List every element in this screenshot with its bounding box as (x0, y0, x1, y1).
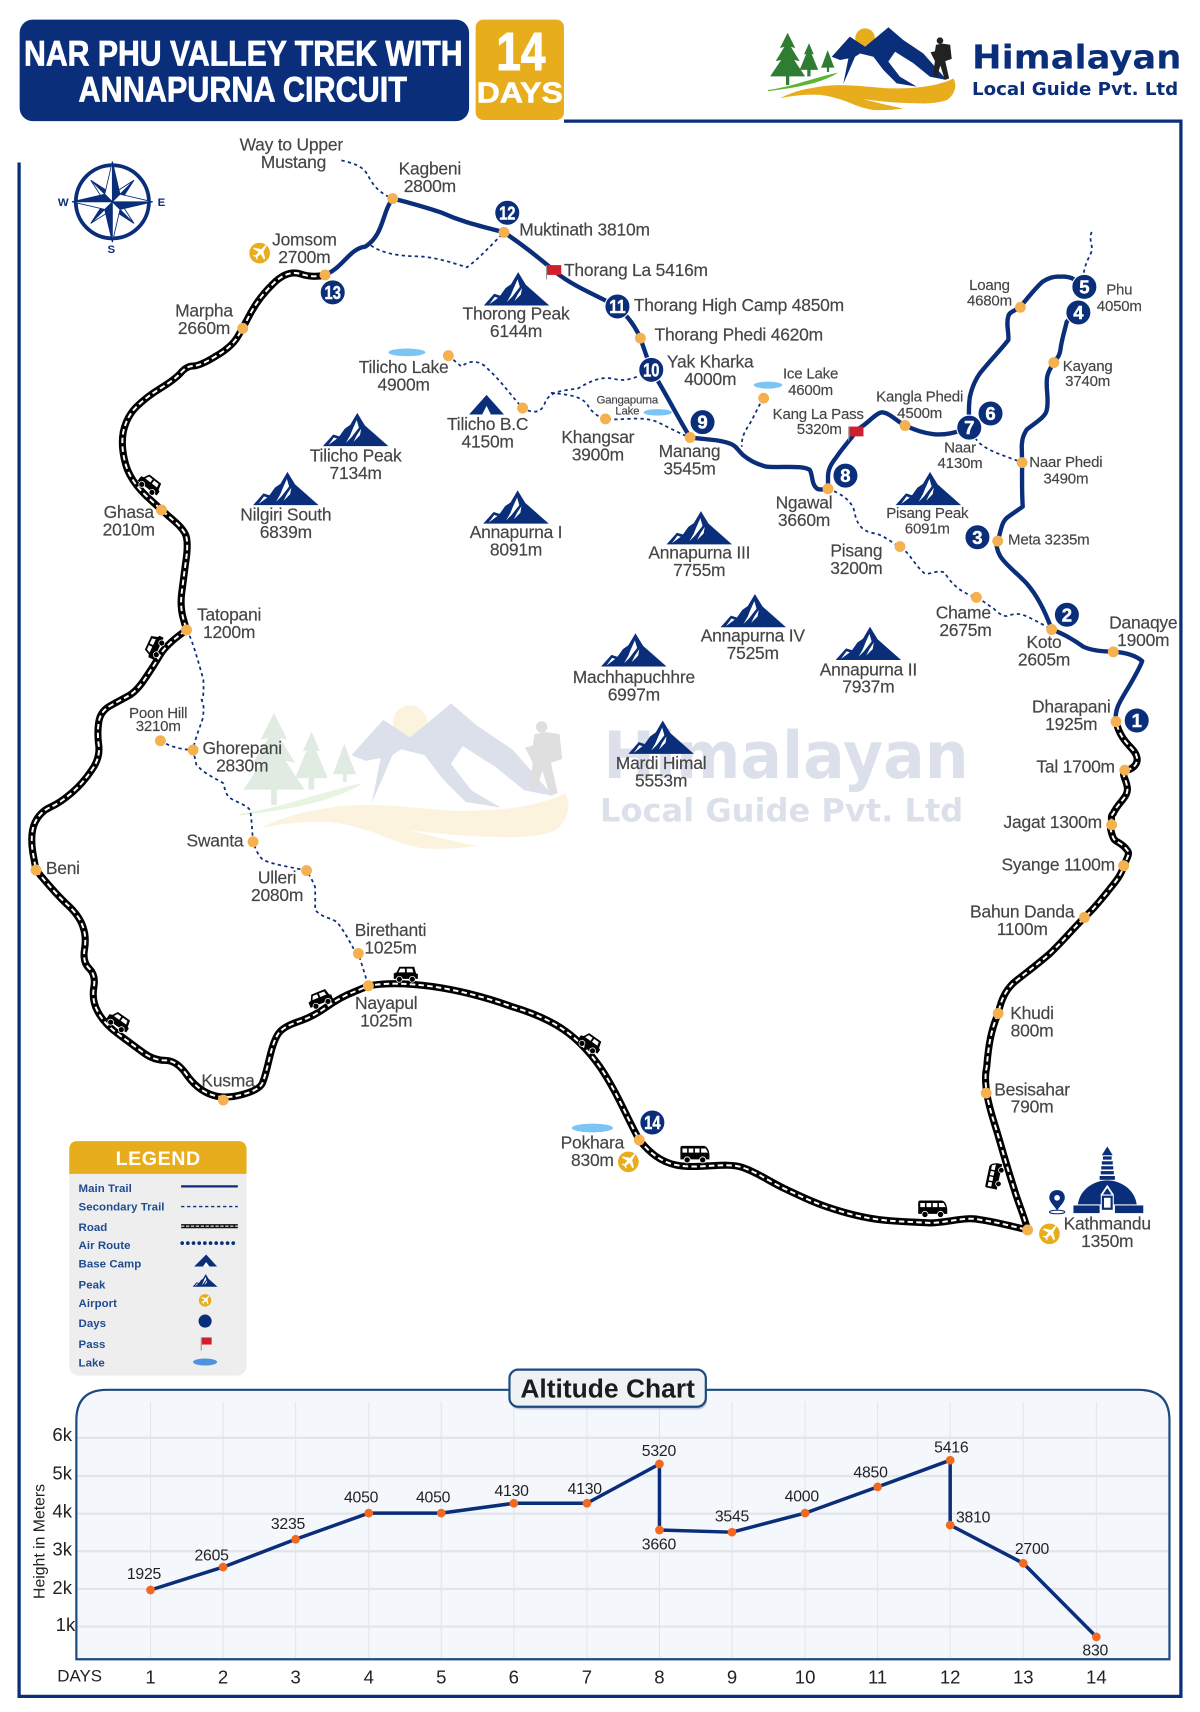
label: Tilicho Peak: 7134m (330, 463, 382, 483)
altitude chart title (509, 1370, 707, 1409)
label: Kusma: Kusma (201, 1071, 255, 1091)
label: Muktinath: Muktinath 3810m (519, 220, 650, 240)
icon: location pin (1049, 1190, 1065, 1214)
label: Tatopani: Tatopani (197, 605, 261, 625)
label: Dharapani: Dharapani (1032, 696, 1111, 716)
label: Poon Hill: Poon Hill (129, 705, 187, 722)
trail stops (31, 193, 1130, 1235)
label: Poon Hill: 3210m (136, 718, 181, 735)
label: Tilicho B.C: 4150m (462, 431, 514, 451)
label: Yak Kharka: 4000m (684, 369, 736, 389)
altitude values: 5416 (934, 1440, 969, 1457)
label: Annapurna I: Annapurna I (470, 522, 562, 542)
altitude axis labels: 4 (364, 1666, 374, 1687)
days badge (476, 20, 564, 120)
compass rose: E (158, 197, 166, 209)
legend: lake: Lake (79, 1357, 105, 1369)
altitude values: 1925 (127, 1566, 162, 1583)
label: Ghorepani: Ghorepani (202, 738, 282, 758)
altitude axis labels: 1 (145, 1666, 156, 1687)
label: Gangapurna Lake: Lake (615, 406, 639, 418)
altitude values: 3810 (956, 1509, 991, 1526)
label: Thorong Peak: 6144m (490, 321, 542, 341)
label: Phu: Phu (1106, 282, 1132, 299)
label: Naar Phedi: 3490m (1043, 470, 1088, 487)
label: Naar: Naar (944, 440, 976, 457)
label: Loang: Loang (969, 277, 1010, 294)
day number badges: 5 (1079, 276, 1090, 297)
label: Jomsom: 2700m (278, 247, 330, 267)
label: Ghasa: 2010m (103, 520, 155, 540)
label: Way to Upper Mustang: Way to Upper (240, 135, 343, 155)
altitude axis labels: 2k (52, 1577, 73, 1598)
label: Way to Upper Mustang: Mustang (261, 152, 326, 172)
label: Nayapul: 1025m (360, 1011, 412, 1031)
company logo: Local Guide Pvt. Ltd (972, 79, 1178, 100)
label: Thorong Peak: Thorong Peak (463, 304, 570, 324)
label: Kayang: 3740m (1065, 373, 1110, 390)
altitude axis labels: 10 (795, 1666, 815, 1687)
label: Tal: Tal 1700m (1036, 756, 1115, 776)
label: Annapurna IV: 7525m (727, 643, 779, 663)
icon: Tilicho base camp (469, 395, 504, 415)
legend panel: LEGEND (116, 1148, 201, 1170)
label: Thorang La: Thorang La 5416m (564, 260, 708, 280)
label: Birethanti: Birethanti (355, 920, 426, 940)
label: Pisang Peak: Pisang Peak (886, 505, 969, 522)
label: Nilgiri South: Nilgiri South (240, 504, 331, 524)
label: Bahun Danda: 1100m (997, 919, 1048, 939)
watermark logo: Local Guide Pvt. Ltd (600, 793, 963, 829)
label: Annapurna III: Annapurna III (648, 543, 750, 563)
legend: days (79, 1315, 212, 1330)
day number badges: 10 (643, 359, 659, 380)
pass flags (547, 265, 863, 441)
altitude values: 4050 (344, 1490, 379, 1507)
label: Machhapuchhre: Machhapuchhre (573, 667, 695, 687)
altitude values: 2700 (1015, 1541, 1050, 1558)
label: Meta: Meta 3235m (1008, 531, 1089, 548)
label: Manang: Manang (659, 441, 720, 461)
label: Bahun Danda: Bahun Danda (970, 901, 1075, 921)
label: Kangla Phedi: Kangla Phedi (876, 388, 963, 405)
label: Kangla Phedi: 4500m (897, 405, 942, 422)
legend: pass: Pass (79, 1339, 105, 1351)
altitude values: 5320 (642, 1443, 676, 1460)
vehicles on road (104, 471, 1005, 1218)
label: Naar Phedi: Naar Phedi (1029, 454, 1102, 471)
label: Khangsar: 3900m (572, 444, 624, 464)
label: Ngawal: 3660m (778, 510, 830, 530)
day number badges: 2 (1062, 604, 1072, 625)
label: Marpha: Marpha (175, 300, 233, 320)
label: Thorang High Camp: Thorang High Camp 4850m (634, 295, 844, 315)
label: Tilicho Peak: Tilicho Peak (310, 445, 402, 465)
label: Besisahar: 790m (1011, 1097, 1053, 1117)
altitude axis labels: 7 (582, 1666, 592, 1687)
watermark logo (239, 703, 969, 849)
map labels (46, 135, 1177, 1251)
legend: peak: Peak (79, 1279, 106, 1291)
altitude axis labels: 2 (218, 1666, 228, 1687)
legend: airport: Airport (79, 1298, 117, 1310)
label: Kang La Pass: Kang La Pass (773, 406, 864, 423)
altitude axis labels: 5 (436, 1666, 446, 1687)
day number badges: 6 (985, 403, 996, 424)
label: Khudi: Khudi (1010, 1003, 1054, 1023)
label: Ice Lake: 4600m (788, 382, 833, 399)
label: Besisahar: Besisahar (994, 1079, 1070, 1099)
day number badges: 7 (964, 417, 974, 438)
label: Ngawal: Ngawal (776, 492, 832, 512)
legend: base camp: Base Camp (79, 1259, 141, 1271)
title banner: ANNAPURNA CIRCUIT (79, 70, 407, 109)
day number badges: 1 (1132, 710, 1142, 731)
label: Mardi Himal: 5553m (635, 771, 687, 791)
altitude values: 4050 (416, 1490, 451, 1507)
secondary trails (160, 160, 1092, 985)
label: Khudi: 800m (1011, 1020, 1053, 1040)
label: Beni: Beni (46, 858, 80, 878)
altitude line (151, 1460, 1096, 1637)
label: Koto: Koto (1026, 632, 1061, 652)
label: Chame: 2675m (939, 620, 992, 640)
label: Birethanti: 1025m (364, 937, 417, 957)
altitude values (127, 1440, 1109, 1659)
legend: lake (79, 1357, 217, 1369)
label: Mardi Himal: Mardi Himal (616, 753, 706, 773)
altitude axis labels: 1k (56, 1614, 76, 1635)
altitude axis labels (32, 1424, 1107, 1687)
legend: days: Days (79, 1318, 106, 1330)
altitude axis labels: 5k (52, 1462, 73, 1483)
label: Phu: 4050m (1097, 298, 1142, 315)
label: Syange: Syange 1100m (1001, 855, 1115, 875)
altitude axis labels: 8 (654, 1666, 665, 1687)
label: Ulleri: Ulleri (258, 868, 296, 888)
label: Tatopani: 1200m (203, 622, 255, 642)
label: Kang La Pass: 5320m (797, 421, 842, 438)
legend: airport (79, 1294, 211, 1310)
altitude axis labels: DAYS (57, 1667, 102, 1686)
altitude axis labels: 14 (1086, 1666, 1107, 1687)
label: Ice Lake: Ice Lake (783, 366, 838, 383)
label: Pisang: 3200m (830, 558, 882, 578)
watermark logo: Himalayan (603, 718, 969, 794)
label: Nayapul: Nayapul (355, 993, 417, 1013)
altitude values: 4130 (568, 1481, 602, 1498)
altitude axis labels: 9 (727, 1666, 737, 1687)
altitude values: 2605 (194, 1548, 229, 1565)
label: Manang: 3545m (663, 459, 716, 479)
altitude values: 4850 (853, 1465, 888, 1482)
day number badges: 9 (697, 412, 708, 433)
day number badges: 4 (1073, 302, 1084, 323)
road (32, 273, 1137, 1230)
peak icons (253, 272, 961, 754)
label: Pisang Peak: 6091m (905, 520, 950, 537)
label: Swanta: Swanta (186, 831, 244, 851)
label: Chame: Chame (936, 603, 991, 623)
legend: main trail: Main Trail (79, 1183, 132, 1195)
legend: pass (79, 1337, 212, 1351)
altitude axis labels: 3 (290, 1666, 301, 1687)
label: Loang: 4680m (967, 292, 1012, 309)
compass rose: W (58, 197, 69, 209)
altitude axis labels: 11 (868, 1666, 887, 1687)
day number badges: 13 (325, 282, 341, 303)
compass rose (58, 161, 166, 256)
day number badges: 12 (499, 202, 515, 223)
label: Gangapurna Lake: Gangapurna (597, 395, 659, 407)
label: Kathmandu: Kathmandu (1064, 1213, 1151, 1233)
altitude axis labels: 6k (52, 1424, 73, 1445)
day number badges: 8 (840, 465, 851, 486)
label: Kathmandu: 1350m (1081, 1231, 1133, 1251)
label: Dharapani: 1925m (1045, 714, 1097, 734)
legend: road: Road (79, 1222, 107, 1234)
label: Kagbeni: 2800m (404, 176, 456, 196)
label: Jagat: Jagat 1300m (1004, 812, 1102, 832)
days badge: 14 (496, 23, 546, 82)
label: Thorang Phedi: Thorang Phedi 4620m (655, 324, 823, 344)
label: Pisang: Pisang (830, 540, 882, 560)
label: Annapurna III: 7755m (673, 560, 725, 580)
label: Jomsom: Jomsom (272, 229, 337, 249)
main trail (325, 199, 1142, 722)
altitude values: 4000 (785, 1489, 819, 1506)
label: Yak Kharka: Yak Kharka (667, 352, 754, 372)
label: Kagbeni: Kagbeni (399, 159, 461, 179)
altitude chart panel (76, 1390, 1169, 1659)
label: Annapurna II: Annapurna II (820, 659, 917, 679)
altitude axis labels: 3k (52, 1539, 73, 1560)
altitude values: 830 (1082, 1642, 1109, 1659)
legend: base camp (79, 1255, 217, 1271)
label: Kayang: Kayang (1063, 358, 1113, 375)
label: Danaqye: 1900m (1117, 630, 1169, 650)
label: Nilgiri South: 6839m (260, 522, 312, 542)
day number badges: 3 (972, 527, 983, 548)
label: Ghasa: Ghasa (104, 502, 154, 522)
label: Pokhara: 830m (571, 1150, 614, 1170)
altitude axis labels: 12 (940, 1666, 960, 1687)
label: Ulleri: 2080m (251, 885, 303, 905)
day number badges (320, 200, 1149, 1135)
label: Machhapuchhre: 6997m (608, 684, 660, 704)
legend: peak (79, 1274, 218, 1291)
altitude values: 3235 (271, 1516, 306, 1533)
label: Danaqye: Danaqye (1109, 612, 1177, 632)
label: Naar: 4130m (938, 455, 982, 472)
icon: Boudhanath stupa (1073, 1147, 1143, 1213)
altitude axis labels: 4k (52, 1500, 73, 1521)
altitude values: 3660 (642, 1537, 676, 1554)
label: Annapurna IV: Annapurna IV (701, 625, 805, 645)
legend: secondary trail: Secondary Trail (79, 1201, 165, 1213)
altitude axis labels: 13 (1013, 1666, 1034, 1687)
company logo: Himalayan (972, 39, 1181, 77)
legend panel (69, 1141, 247, 1376)
altitude values: 3545 (715, 1508, 750, 1525)
altitude chart title: Altitude Chart (520, 1373, 695, 1403)
day number badges: 11 (609, 296, 626, 317)
title banner: NAR PHU VALLEY TREK WITH (24, 34, 463, 73)
label: Ghorepani: 2830m (216, 755, 268, 775)
airport icons (249, 243, 1060, 1244)
altitude values: 4130 (494, 1483, 529, 1500)
label: Tilicho B.C: Tilicho B.C (447, 414, 528, 434)
label: Pokhara: Pokhara (561, 1133, 625, 1153)
label: Annapurna II: 7937m (842, 677, 894, 697)
lakes (388, 349, 782, 1132)
label: Tilicho Lake: 4900m (378, 375, 430, 395)
compass rose: S (107, 244, 115, 256)
days badge: DAYS (477, 78, 563, 110)
title banner (20, 20, 469, 121)
label: Tilicho Lake: Tilicho Lake (359, 357, 449, 377)
company logo (768, 27, 1181, 110)
day number badges: 14 (644, 1112, 661, 1133)
label: Marpha: 2660m (178, 318, 230, 338)
altitude axis labels: 6 (509, 1666, 519, 1687)
label: Annapurna I: 8091m (490, 539, 542, 559)
legend: air route: Air Route (79, 1240, 131, 1252)
altitude axis labels: Height in Meters (32, 1484, 49, 1599)
label: Khangsar: Khangsar (561, 427, 635, 447)
altitude data points (146, 1456, 1101, 1641)
label: Koto: 2605m (1018, 649, 1070, 669)
